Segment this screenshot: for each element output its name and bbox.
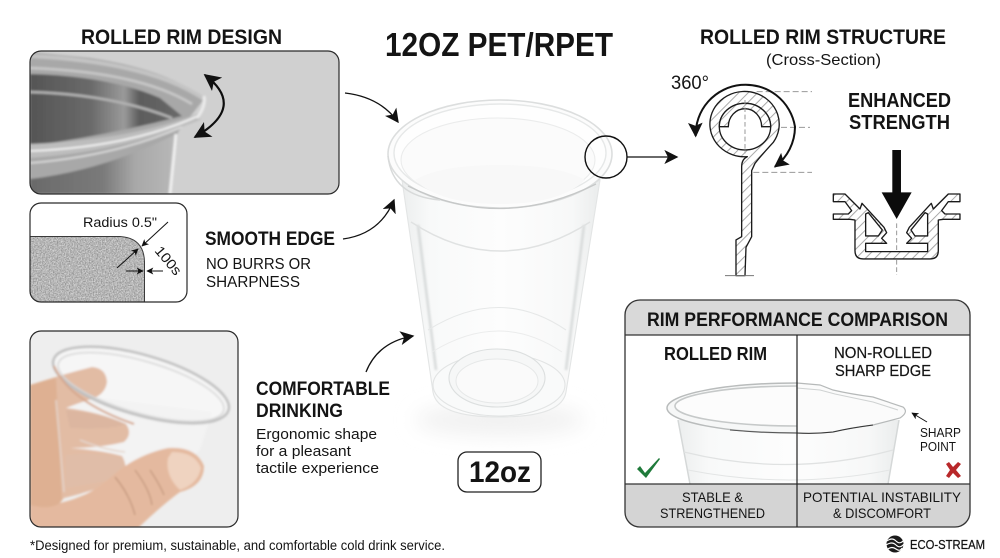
footer text: rolled: STABLE & [682,489,744,505]
text block: comfortable drinking: for a pleasant [256,443,352,460]
arrow: comfortable drinking to cup [366,336,413,372]
heading: rolled rim structure [700,26,946,69]
icon: double-headed curved arrow [195,75,224,137]
heading: enhanced strength: STRENGTH [849,111,950,134]
column heading: non-rolled sharp edge: SHARP EDGE [835,363,931,380]
footer text: rolled [660,489,765,521]
arrow: smooth edge to cup [343,200,394,239]
panel: rolled rim photo [30,51,339,194]
text block: smooth edge [205,229,335,291]
arrow: rolled rim to cup [345,93,398,122]
column heading: rolled rim: ROLLED RIM [664,344,767,364]
logo: eco-stream [886,536,985,552]
text block: comfortable drinking: DRINKING [256,401,343,422]
text block: comfortable drinking: COMFORTABLE [256,379,390,400]
header text: RIM PERFORMANCE COMPARISON [647,310,948,331]
comparison cup illustration [667,383,927,484]
text block: comfortable drinking: Ergonomic shape [256,426,377,443]
panel: radius diagram [30,203,187,302]
callout: sharp point: SHARP [920,425,961,440]
text block: smooth edge: NO BURRS OR [206,256,311,273]
arrow: circle to structure [627,156,677,158]
heading: rolled rim structure: ROLLED RIM STRUCTURE [700,26,946,49]
footnote: *Designed for premium, sustainable, and comfortable cold drink service. [30,538,445,553]
heading: enhanced strength: ENHANCED [848,89,951,112]
size badge: 12oz: 12oz [469,456,531,489]
radius arrows [117,222,168,271]
text block: smooth edge: SHARPNESS [206,274,300,291]
title: 12OZ PET/RPET [385,26,613,63]
diagram: rim cross-section [696,85,812,276]
heading: rolled rim structure: (Cross-Section) [766,52,881,69]
column heading: non-rolled sharp edge [834,345,932,380]
heading: rolled rim design: ROLLED RIM DESIGN [81,26,282,49]
icon: downward force arrow [882,150,912,219]
label: 100s: 100s [152,243,185,278]
illustration: clear cup [388,100,612,436]
panel: rim performance comparison [625,300,970,527]
icon: green check [637,458,660,478]
column heading: non-rolled sharp edge: NON-ROLLED [834,345,932,362]
icon: 360 rotation arrows [696,85,795,167]
header bar [625,300,970,335]
panel: hand holding cup photo [30,331,238,530]
size badge: 12oz [458,452,541,492]
footer text: non-rolled: POTENTIAL INSTABILITY [803,489,962,505]
text block: comfortable drinking [256,379,390,477]
footer text: non-rolled [803,489,962,521]
text block: comfortable drinking: tactile experience [256,460,379,477]
footer bar [625,484,970,527]
callout: sharp point: POINT [920,439,956,454]
text block: smooth edge: SMOOTH EDGE [205,229,335,250]
callout: rim magnifier circle [585,136,627,178]
heading: enhanced strength [848,89,951,134]
footer text: rolled: STRENGTHENED [660,505,765,521]
callout: sharp point [912,413,961,454]
logo: eco-stream: ECO-STREAM [910,538,985,552]
label: 360 degrees: 360° [671,73,709,94]
footer text: non-rolled: & DISCOMFORT [833,505,931,521]
diagram: enhanced strength profile [833,150,960,275]
label: radius: Radius 0.5" [83,215,157,230]
icon: red cross [946,462,961,478]
